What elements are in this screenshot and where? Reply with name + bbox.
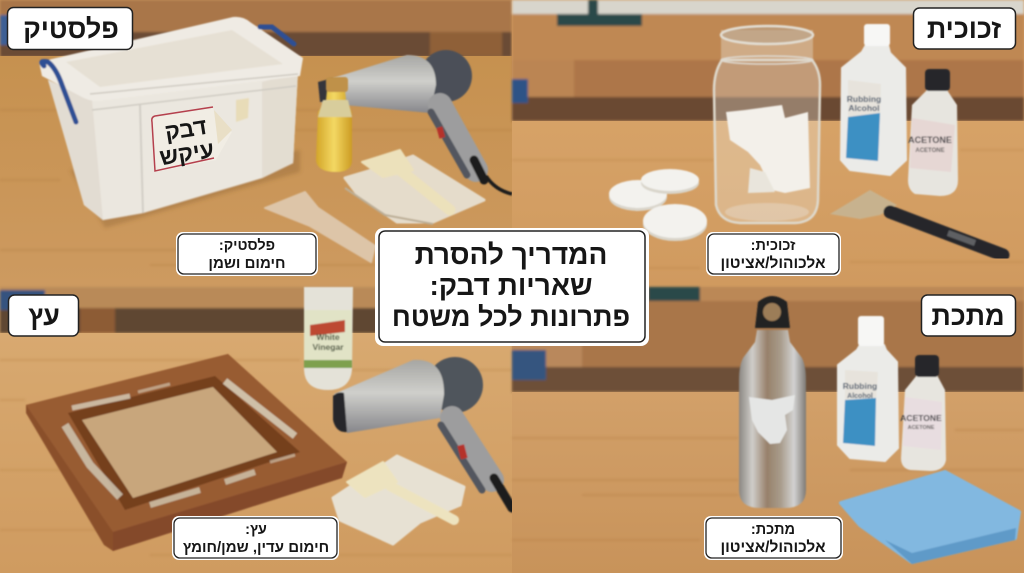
icon: wooden frame with residue [26,354,347,551]
icon: rubbing alcohol bottle: Rubbing [847,94,881,104]
icon: acetone bottle: ACETONE [908,425,935,431]
icon: blue microfiber cloth [841,472,1019,564]
icon: rubbing alcohol bottle [838,316,898,461]
icon: glass jar with residue [714,26,820,223]
tag: plastic [8,8,132,50]
tag: glass: זכוכית [927,14,1001,44]
icon: white vinegar bottle [304,287,353,390]
tag: wood [8,295,78,336]
icon: acetone bottle: ACETONE [908,135,952,145]
icon: sticker "sticky glue" [152,106,232,172]
tag: metal [922,295,1016,336]
icon: rubbing alcohol bottle [841,24,906,175]
icon: acetone bottle [900,355,946,471]
caption: metal [704,516,843,560]
panel: metal [512,287,1024,573]
icon: oil bottle [316,77,352,172]
icon: translucent scraper [265,192,375,262]
tag: glass [914,8,1016,49]
icon: cotton pads [609,169,707,241]
icon: rubbing alcohol bottle: Rubbing [843,381,877,391]
icon: towel and scraper [345,150,484,224]
icon: acetone bottle: ACETONE [915,148,945,154]
icon: white vinegar bottle: Vinegar [312,342,344,352]
caption: wood: חימום עדין, שמן/חומץ [183,539,329,556]
tag: wood: עץ [28,301,60,331]
panel: glass [512,0,1024,287]
icon: sticker "sticky glue": עיקש [158,136,216,170]
icon: plastic box with sticker [39,17,303,228]
caption: wood [172,516,339,560]
panel: plastic [0,0,512,287]
caption: plastic: פלסטיק: [219,238,275,254]
panel: wood [0,287,512,573]
caption: glass [706,232,841,276]
title: פתרונות לכל משטח [392,302,630,332]
icon: hair dryer [333,357,512,508]
icon: steel bottle [739,296,806,508]
caption: glass: זכוכית: [751,238,796,254]
icon: hair dryer [318,50,512,194]
title: שאריות דבק: [429,270,593,301]
caption: metal: אלכוהול/אציטון [720,539,826,556]
caption: plastic: חימום ושמן [208,255,286,272]
tag: metal: מתכת [931,301,1005,331]
title: המדריך להסרת [415,239,607,270]
icon: rubbing alcohol bottle: Alcohol [847,393,873,400]
icon: glass scraper [830,190,1003,255]
caption: wood: עץ: [245,522,267,538]
icon: towel and scraper [333,456,464,544]
caption: plastic [176,232,318,276]
icon: acetone bottle: ACETONE [900,413,942,423]
icon: sticker "sticky glue": דבק [163,113,209,145]
icon: white vinegar bottle: White [316,332,340,342]
tag: plastic: פלסטיק [23,14,119,44]
icon: acetone bottle [908,69,958,196]
icon: rubbing alcohol bottle: Alcohol [848,103,880,113]
title [375,228,649,346]
caption: glass: אלכוהול/אציטון [720,255,826,272]
caption: metal: מתכת: [751,522,795,538]
